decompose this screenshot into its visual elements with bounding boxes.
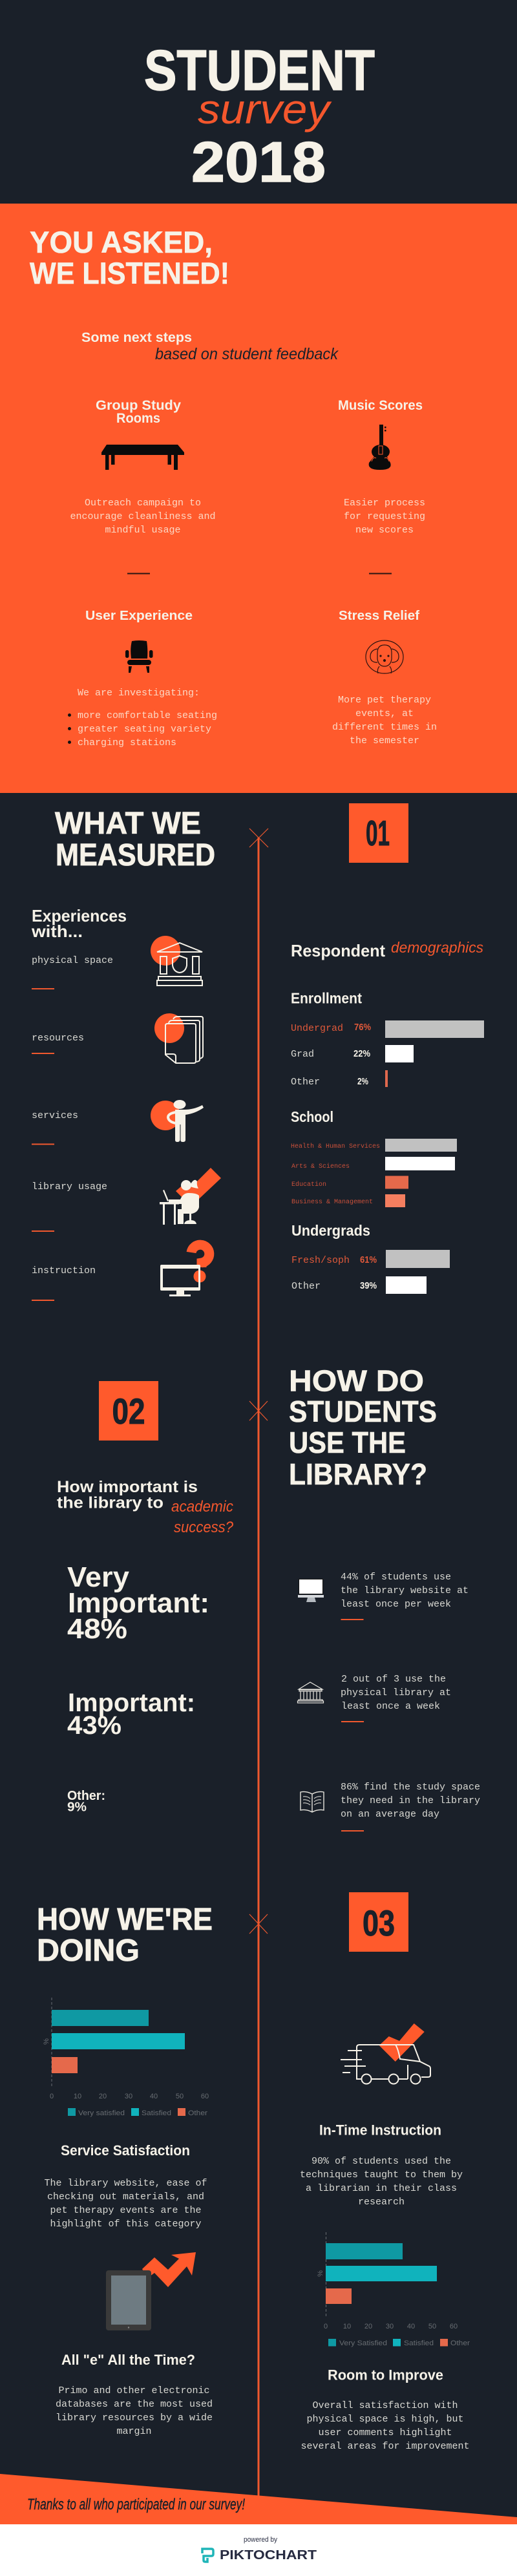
number badge 03 [349, 1892, 408, 1952]
icon: small library building [297, 1682, 323, 1703]
card text: different times in [332, 722, 437, 733]
text: in-time instruction: techniques taught to them by [300, 2170, 463, 2180]
card text: More pet therapy [338, 695, 431, 706]
icon: armchair [125, 640, 153, 673]
stat: very important: Important: [68, 1587, 209, 1619]
heading: DOING [37, 1934, 140, 1968]
heading: demographics [391, 939, 483, 956]
stat: very important [67, 1561, 209, 1645]
stat text: website: the library website at [341, 1585, 469, 1596]
icon: dog [366, 640, 403, 673]
question heading: the library to [57, 1494, 164, 1512]
row: physical space [32, 955, 113, 989]
question heading: academic [171, 1498, 233, 1515]
bar chart: service satisfaction: Other [188, 2109, 207, 2117]
chart: enrollment: Enrollment [291, 990, 362, 1007]
card: stress relief [332, 609, 437, 746]
text: room to improve: Overall satisfaction with [312, 2400, 458, 2411]
bar chart: service satisfaction: 20 [99, 2093, 107, 2100]
question heading: success? [174, 1519, 234, 1536]
chart: undergrads: Fresh/soph [291, 1255, 350, 1266]
card heading [96, 398, 181, 426]
center timeline line [257, 838, 260, 2496]
bar chart: service satisfaction: 60 [201, 2093, 209, 2100]
subheading: service satisfaction: Service Satisfaction [61, 2142, 190, 2159]
card text: mindful usage [105, 525, 181, 536]
stat text: physical library [341, 1674, 451, 1722]
text: service satisfaction: checking out materials, and [47, 2191, 204, 2202]
stat: other: Other: [67, 1789, 105, 1803]
stat: important: 43% [67, 1711, 121, 1740]
stat text: study space [341, 1782, 480, 1832]
stat text: physical library: physical library at [341, 1687, 451, 1698]
chart: school: Education [291, 1181, 326, 1188]
stat: other [67, 1789, 105, 1815]
card text [70, 498, 216, 536]
chart: school: Business & Management [291, 1198, 373, 1206]
bar chart: room to improve: 20 [364, 2323, 372, 2330]
card heading: User Experience [85, 609, 193, 623]
number badge 03: 03 [363, 1903, 395, 1943]
chart: undergrads: 39% [360, 1280, 377, 1291]
icon: person pointing [151, 1100, 204, 1142]
bar chart: room to improve: 0 [324, 2323, 328, 2330]
card: user experience [68, 609, 217, 748]
panel: respondent demographics [291, 803, 484, 1294]
bar chart: service satisfaction: 0 [50, 2093, 54, 2100]
icon: building [151, 936, 202, 986]
card heading: Group Study [96, 398, 181, 413]
chart: undergrads: Other [291, 1281, 321, 1292]
subheading: experiences with [31, 906, 127, 941]
card text [344, 498, 425, 536]
panel: how do students use the library [289, 1364, 480, 1832]
bullet list: charging stations [78, 737, 176, 748]
text: all e all the time: library resources by a wide [56, 2412, 213, 2423]
stat: important: Important: [68, 1689, 195, 1717]
number badge 02: 02 [112, 1391, 145, 1431]
card text: Easier process [344, 498, 425, 509]
bar chart: service satisfaction: Very satisfied [78, 2109, 125, 2117]
bar chart: room to improve: 50 [428, 2323, 436, 2330]
powered by: powered by [244, 2536, 277, 2544]
cross mark 1 [249, 829, 268, 847]
stat text: study space: they need in the library [341, 1795, 480, 1806]
cross mark 2 [249, 1401, 268, 1420]
heading [291, 939, 483, 960]
chart: school [291, 1108, 457, 1207]
logo wordmark: PIKTOCHART [220, 2548, 317, 2562]
title script: survey: survey [198, 86, 332, 132]
question heading [57, 1478, 234, 1536]
card heading: Rooms [116, 411, 160, 426]
title: STUDENT [144, 38, 375, 102]
subheading: all e all the time: All "e" All the Time? [61, 2352, 195, 2368]
bar chart: service satisfaction: % [43, 2038, 50, 2045]
panel: how we're doing [37, 1903, 213, 2437]
number badge 01 [349, 803, 408, 863]
chart: enrollment: 76% [354, 1022, 371, 1033]
heading: you asked: WE LISTENED! [30, 256, 229, 290]
bullet list: more comfortable seating [78, 710, 217, 721]
card text: for requesting [344, 511, 425, 522]
chart: enrollment: 2% [357, 1076, 368, 1087]
icon: tablet with rising arrow [106, 2252, 196, 2330]
stat text: physical library: 2 out of 3 use the [341, 1674, 446, 1685]
heading: HOW WE'RE [37, 1903, 213, 1937]
bar chart: service satisfaction: 40 [150, 2093, 158, 2100]
text: room to improve: user comments highlight [318, 2427, 452, 2438]
text: all e all the time [56, 2385, 213, 2437]
bullet list [68, 710, 217, 748]
subheading: experiences with: Experiences [32, 906, 127, 925]
row: library usage: library usage [32, 1181, 107, 1192]
stat text: website [341, 1572, 469, 1620]
card: music scores [338, 398, 425, 574]
bar chart: service satisfaction [43, 1998, 209, 2117]
panel: title header [144, 38, 375, 194]
stat text: physical library: least once a week [341, 1701, 440, 1712]
chart: school: Arts & Sciences [291, 1163, 350, 1170]
row: library usage [32, 1181, 107, 1232]
number badge 02 [99, 1381, 158, 1441]
chart: school: School [291, 1108, 333, 1125]
text: all e all the time: databases are the most used [56, 2399, 213, 2410]
bar chart: room to improve: 60 [450, 2323, 458, 2330]
row: physical space: physical space [32, 955, 113, 966]
thank you note: Thanks to all who participated in our survey! [27, 2496, 245, 2513]
card text [332, 695, 437, 746]
heading: MEASURED [56, 838, 215, 872]
bar chart: service satisfaction: 50 [176, 2093, 184, 2100]
footer banner [0, 2474, 517, 2524]
row: services [32, 1110, 78, 1145]
subheading: experiences with: with... [31, 922, 83, 941]
card heading: Stress Relief [339, 609, 419, 623]
row: services: services [32, 1110, 78, 1121]
card text: encourage cleanliness and [70, 511, 216, 522]
heading: USE THE [289, 1426, 406, 1459]
heading: LIBRARY? [289, 1457, 427, 1491]
panel: you asked, we listened [0, 204, 517, 793]
row: instruction: instruction [32, 1265, 96, 1276]
bar chart: room to improve: 40 [407, 2323, 415, 2330]
chart: school: Health & Human Services [291, 1143, 380, 1150]
subheading: in-time instruction: In-Time Instruction [319, 2122, 441, 2138]
text: in-time instruction: 90% of students used the [311, 2156, 451, 2167]
chart: enrollment [291, 990, 484, 1088]
text: in-time instruction [300, 2156, 463, 2208]
text: room to improve: several areas for improvement [301, 2441, 470, 2452]
row: resources [32, 1033, 84, 1054]
icon: laptop [298, 1579, 324, 1602]
stat: very important: Very [67, 1561, 130, 1593]
chart: enrollment: Grad [291, 1049, 314, 1060]
stat text: study space: on an average day [341, 1809, 439, 1820]
icon: table [101, 445, 184, 470]
bar chart: room to improve [317, 2232, 470, 2347]
text: room to improve: physical space is high, but [306, 2414, 464, 2425]
title year: 2018 [191, 130, 326, 194]
number badge 01: 01 [366, 813, 390, 853]
chart: enrollment: Undergrad [291, 1023, 343, 1034]
panel: instruction and room to improve [300, 1892, 470, 2452]
row: resources: resources [32, 1033, 84, 1044]
cross mark 3 [249, 1914, 268, 1934]
chart: enrollment: 22% [353, 1048, 370, 1059]
panel: academic success importance [57, 1381, 234, 1815]
bar chart: service satisfaction: 30 [125, 2093, 132, 2100]
chart: undergrads: Undergrads [291, 1222, 370, 1239]
text: service satisfaction: pet therapy events are the [50, 2205, 202, 2216]
chart: enrollment: Other [291, 1077, 320, 1088]
stat text: website: least once per week [341, 1599, 451, 1610]
heading [55, 807, 215, 872]
stat: other: 9% [67, 1800, 87, 1815]
icon: delivery truck with check [341, 2023, 430, 2084]
heading [289, 1364, 437, 1491]
subheading: room to improve: Room to Improve [328, 2367, 443, 2383]
text: in-time instruction: research [358, 2197, 405, 2208]
bar chart: service satisfaction: Satisfied [142, 2109, 171, 2117]
question heading: How important is [57, 1478, 198, 1496]
chart: undergrads [291, 1222, 450, 1294]
panel: what we measured [31, 807, 221, 1301]
bar chart: room to improve: 30 [386, 2323, 394, 2330]
card text: events, at [355, 708, 414, 719]
card: group study rooms [70, 398, 216, 574]
heading: STUDENTS [289, 1395, 437, 1428]
row: instruction [32, 1265, 96, 1301]
card text: new scores [355, 525, 414, 536]
bar chart: room to improve: Very Satisfied [339, 2339, 387, 2347]
text: service satisfaction: The library website, ease of [44, 2178, 207, 2189]
stat text: study space: 86% find the study space [341, 1782, 480, 1793]
piktochart credit [202, 2536, 317, 2562]
heading: WHAT WE [55, 807, 201, 841]
chart: undergrads: 61% [360, 1254, 377, 1265]
bullet list: greater seating variety [78, 724, 211, 735]
text: all e all the time: margin [116, 2426, 152, 2437]
text: all e all the time: Primo and other electronic [58, 2385, 210, 2396]
stat: important [67, 1689, 195, 1740]
text: room to improve [301, 2400, 470, 2452]
card heading: Music Scores [338, 398, 423, 413]
icon: open book [301, 1791, 324, 1812]
bar chart: service satisfaction: 10 [74, 2093, 81, 2100]
card text: Outreach campaign to [85, 498, 201, 509]
bar chart: room to improve: % [317, 2270, 324, 2277]
icon: monitor and question mark [160, 1245, 209, 1296]
heading [37, 1903, 213, 1968]
heading: you asked: YOU ASKED, [30, 225, 213, 259]
heading: HOW DO [289, 1364, 424, 1397]
bar chart: room to improve: 10 [343, 2323, 351, 2330]
card text: the semester [350, 735, 419, 746]
icon: student at desk [160, 1168, 221, 1225]
script subheading: based on student feedback: based on student feedback [155, 345, 339, 363]
subheading: some next steps: Some next steps [81, 330, 192, 345]
card text: We are investigating: [78, 688, 200, 699]
text: service satisfaction [44, 2178, 207, 2230]
bar chart: room to improve: Other [450, 2339, 470, 2347]
text: in-time instruction: a librarian in their class [306, 2183, 457, 2194]
text: service satisfaction: highlight of this category [50, 2219, 202, 2230]
heading: you asked [30, 225, 229, 290]
bar chart: room to improve: Satisfied [404, 2339, 434, 2347]
stat: very important: 48% [67, 1613, 127, 1645]
icon: violin [369, 425, 391, 470]
heading: Respondent [291, 941, 385, 960]
icon: documents [154, 1013, 203, 1063]
logo mark [202, 2549, 213, 2562]
stat text: website: 44% of students use [341, 1572, 451, 1583]
